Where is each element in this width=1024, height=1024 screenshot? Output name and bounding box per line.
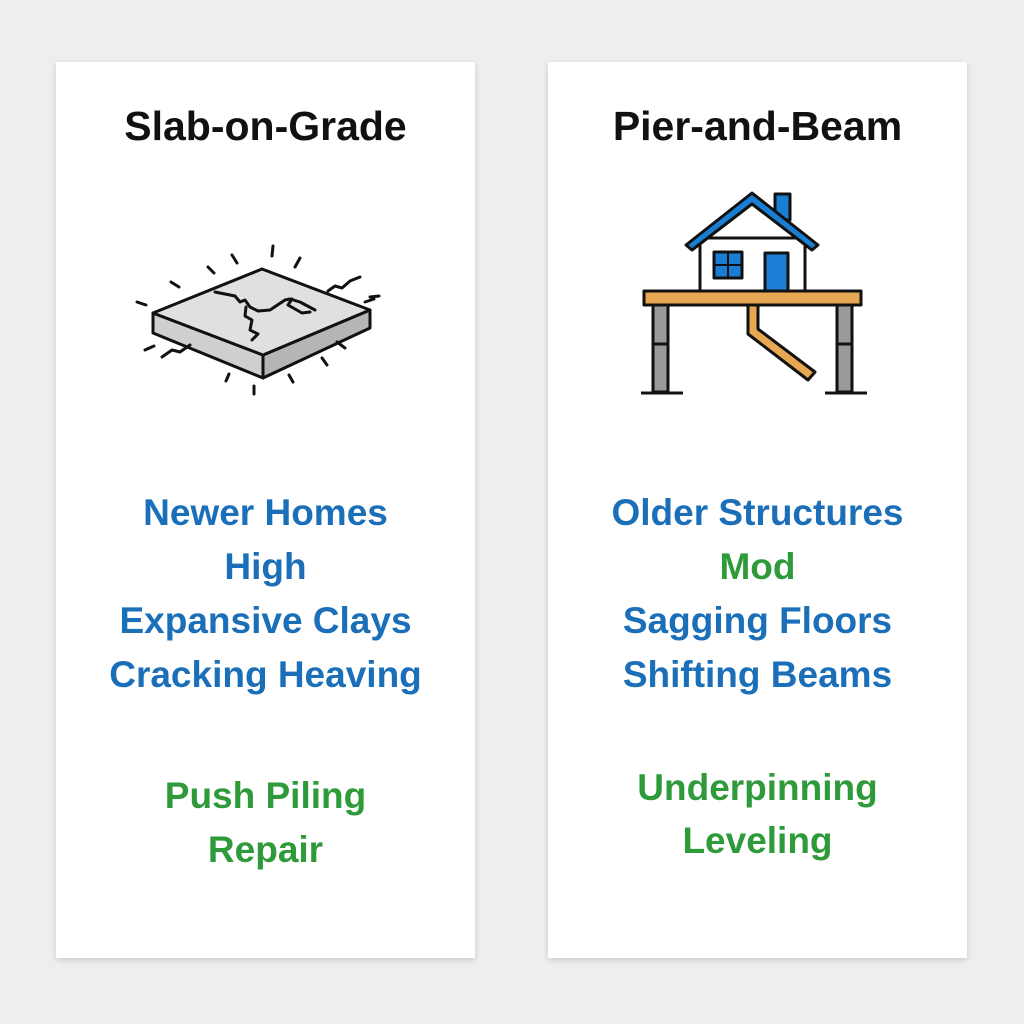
panel: slab-on-grade	[56, 62, 475, 958]
text: newer homes: Newer Homes	[143, 492, 388, 533]
text: shifting beams: Shifting Beams	[623, 654, 892, 695]
icon: house on piers	[641, 192, 867, 394]
text: push piling: Push Piling	[165, 775, 366, 816]
text: leveling: Leveling	[682, 820, 833, 861]
text: older structures: Older Structures	[612, 492, 903, 533]
icon: cracked slab	[136, 244, 380, 396]
text: expansive clays: Expansive Clays	[119, 600, 412, 641]
text: underpinning: Underpinning	[637, 767, 878, 808]
heading: pier-and-beam: Pier-and-Beam	[613, 103, 902, 149]
text: cracking heaving: Cracking Heaving	[109, 654, 422, 695]
text: mod: Mod	[719, 546, 796, 587]
text: high: High	[224, 546, 307, 587]
text: sagging floors: Sagging Floors	[623, 600, 892, 641]
panel: pier-and-beam	[548, 62, 967, 958]
text: repair: Repair	[208, 829, 323, 870]
heading: slab-on-grade: Slab-on-Grade	[124, 103, 407, 149]
